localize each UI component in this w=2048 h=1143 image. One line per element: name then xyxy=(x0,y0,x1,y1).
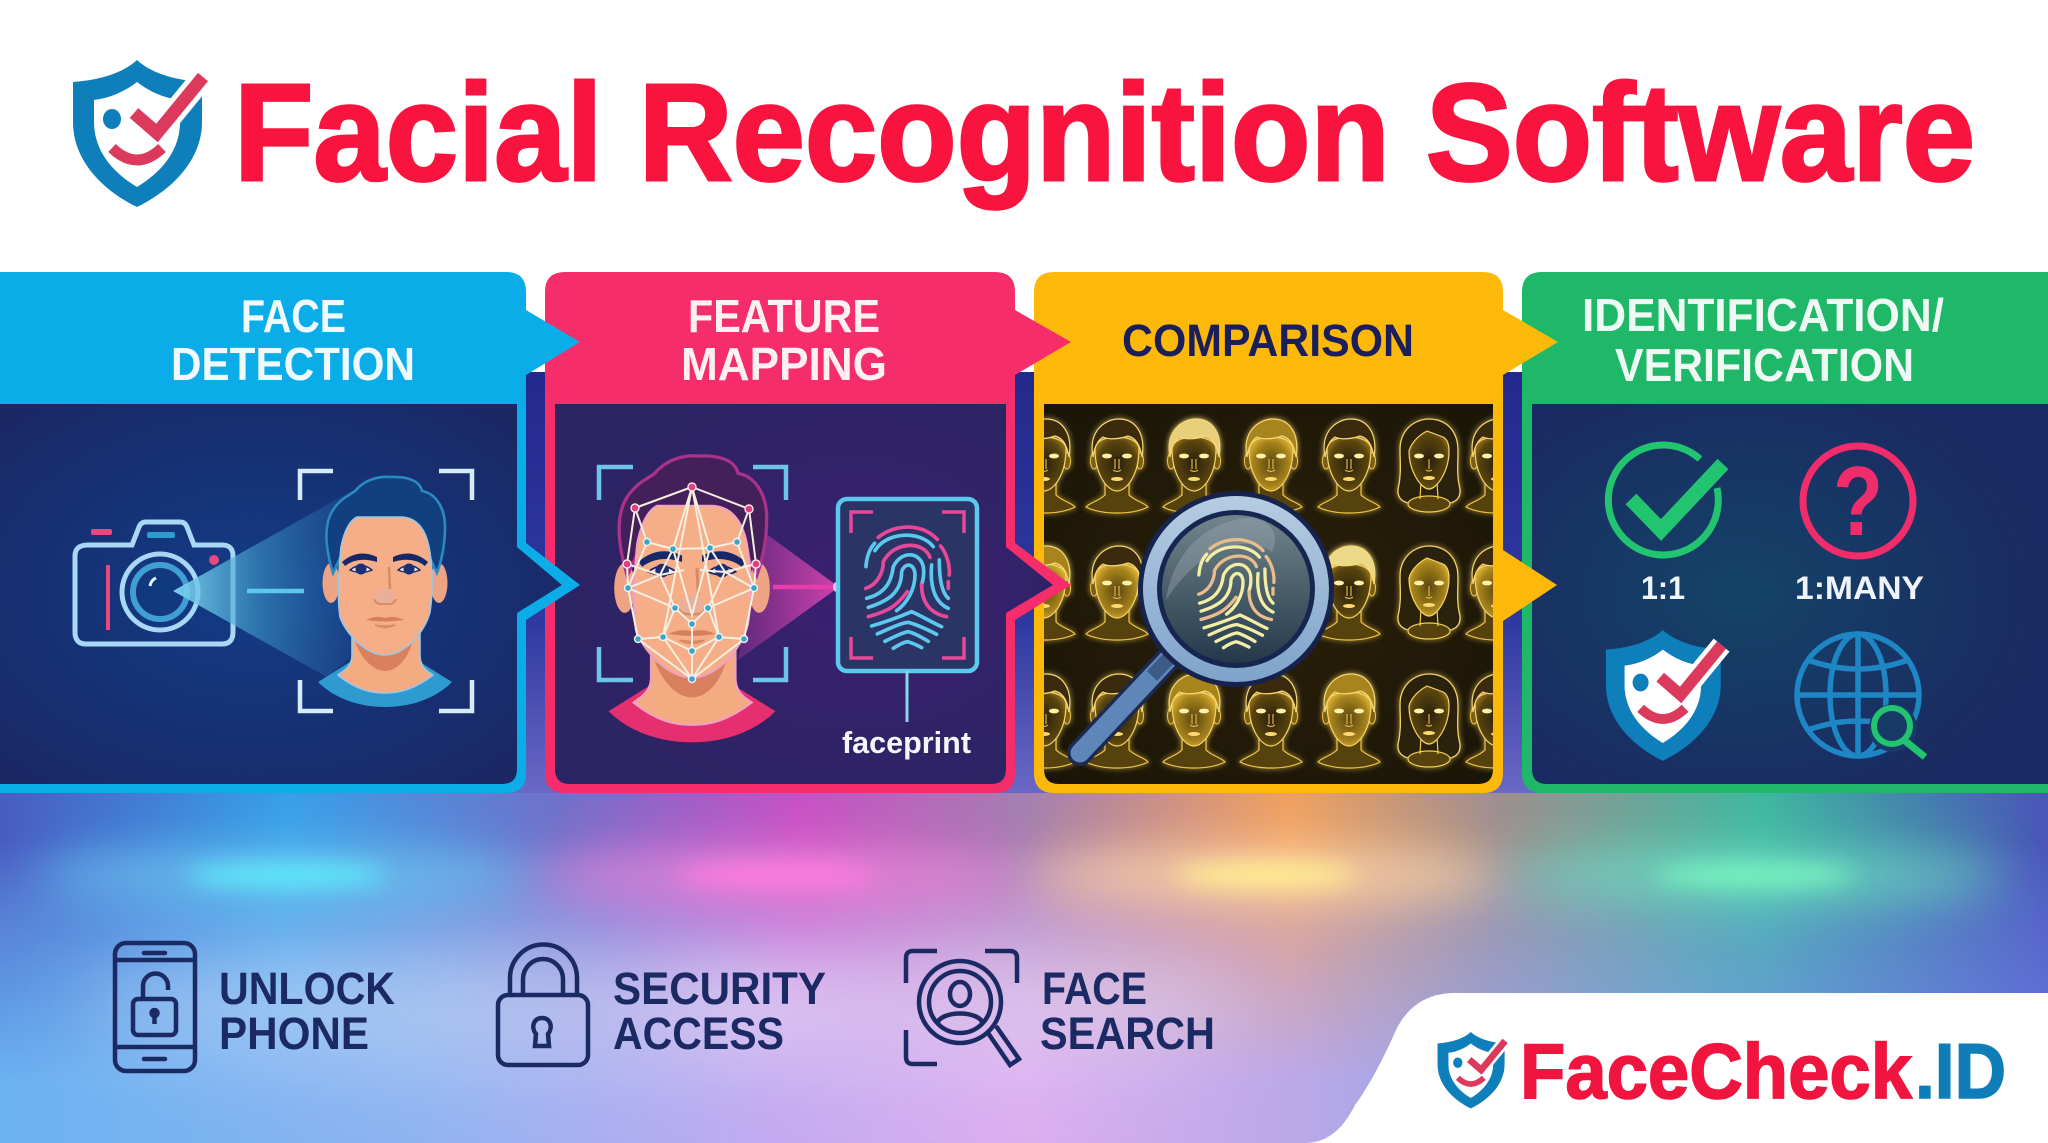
scan brackets xyxy=(300,471,472,711)
label: one to many: 1:MANY xyxy=(1795,570,1924,606)
icon: magnifying glass with fingerprint xyxy=(1080,491,1334,753)
use case: unlock phone xyxy=(115,943,395,1071)
icon: camera xyxy=(75,522,233,644)
brand logo shield xyxy=(1438,1032,1505,1108)
beam dash xyxy=(247,589,304,593)
grid of glowing faces xyxy=(1044,404,1493,784)
panel: identification / verification xyxy=(1522,272,2048,793)
label: phone: PHONE xyxy=(219,1008,369,1059)
label: unlock: UNLOCK xyxy=(219,963,395,1014)
icon: question circle xyxy=(1803,446,1913,556)
gradient background band xyxy=(0,780,2048,1143)
heading line two: VERIFICATION xyxy=(1615,339,1914,391)
label: one to one: 1:1 xyxy=(1641,570,1685,606)
heading: identification / verification: IDENTIFICATION/ xyxy=(1582,289,1944,341)
icon: faceprint card xyxy=(838,499,977,671)
label: access: ACCESS xyxy=(613,1008,784,1059)
panel: feature mapping xyxy=(545,272,1071,793)
use case: security access xyxy=(498,944,826,1065)
beam to faceprint xyxy=(738,528,839,660)
title logo shield xyxy=(73,60,203,207)
panel: face detection xyxy=(0,272,580,793)
connector to label xyxy=(906,671,908,722)
brand suffix: .ID xyxy=(1915,1027,2006,1115)
icon: face search magnifier xyxy=(906,951,1019,1065)
brand wordmark: FaceCheck xyxy=(1520,1027,1913,1115)
icon: shield check xyxy=(1606,630,1722,761)
heading: mapping: MAPPING xyxy=(681,338,887,390)
label: security: SECURITY xyxy=(613,963,826,1014)
use case: face search xyxy=(906,951,1215,1065)
dark band behind panels xyxy=(0,372,2048,793)
brand footer card xyxy=(1305,993,2048,1143)
scan brackets xyxy=(599,467,786,680)
label: face: FACE xyxy=(1042,963,1147,1014)
label: search: SEARCH xyxy=(1040,1008,1215,1059)
heading: comparison: COMPARISON xyxy=(1122,315,1414,366)
face portrait xyxy=(318,477,452,707)
label: faceprint: faceprint xyxy=(842,725,971,760)
icon: green check circle xyxy=(1608,445,1723,555)
panel: comparison xyxy=(1013,272,1558,793)
icon: phone with open lock xyxy=(115,943,195,1071)
beam from camera xyxy=(173,487,370,677)
face with mesh xyxy=(609,456,775,742)
connector to faceprint xyxy=(773,581,845,593)
heading: face: FACE xyxy=(241,290,346,342)
icon: padlock xyxy=(498,944,588,1065)
heading: detection: DETECTION xyxy=(171,338,415,390)
icon: globe search xyxy=(1797,634,1925,757)
title: Facial Recognition Software xyxy=(234,56,1975,210)
heading: feature: FEATURE xyxy=(688,290,880,342)
icon: question circle: ? xyxy=(1833,446,1883,556)
